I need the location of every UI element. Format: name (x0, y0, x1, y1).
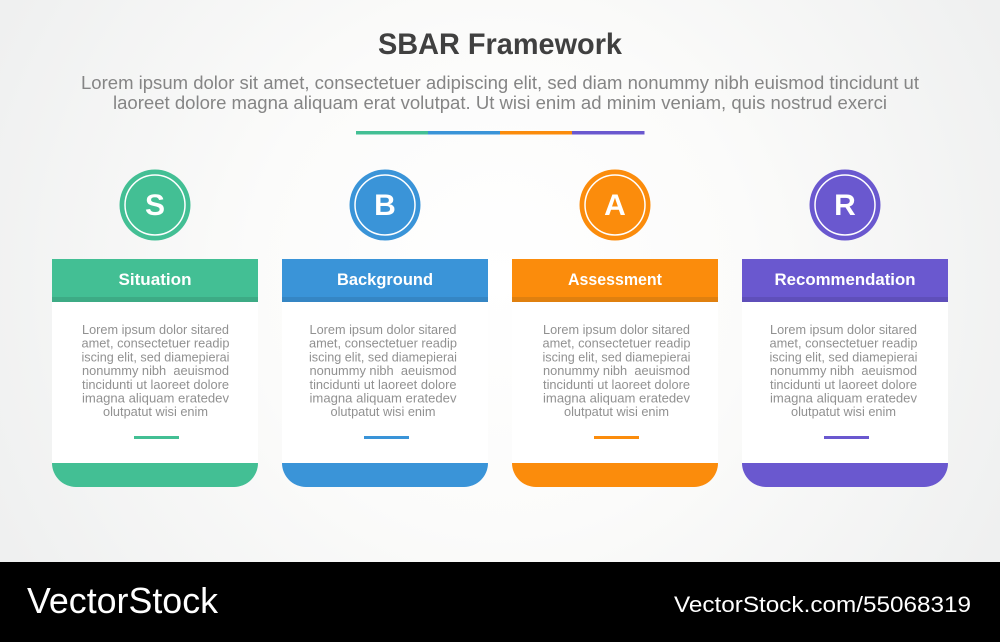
card footer (52, 463, 258, 487)
card body (282, 300, 488, 463)
accent dash (364, 436, 409, 439)
description text (542, 322, 691, 419)
description text: Lorem ipsum dolor sitared (82, 322, 229, 337)
description text: iscing elit, sed diamepierai (82, 349, 230, 364)
card footer (282, 463, 488, 487)
card footer (742, 463, 948, 487)
accent dash (134, 436, 179, 439)
description text: tincidunti ut laoreet dolore (770, 377, 917, 392)
accent dash (594, 436, 639, 439)
description text: iscing elit, sed diamepierai (770, 349, 918, 364)
description text: nonummy nibh aeuismod (310, 363, 456, 378)
subtitle text: laoreet dolore magna aliquam erat volutpat. Ut wisi enim ad minim veniam, quis nostrud exerci (113, 93, 887, 113)
card body (512, 300, 718, 463)
icon: A circle: A (604, 189, 626, 222)
title: SBAR Framework (378, 28, 622, 61)
description text: amet, consectetuer readip (309, 336, 457, 351)
card footer (512, 463, 718, 487)
header: Assessment (512, 259, 718, 302)
description text: iscing elit, sed diamepierai (542, 349, 690, 364)
description text (82, 322, 230, 419)
description text: imagna aliquam eratedev (310, 390, 457, 406)
header: Assessment: Assessment (568, 271, 662, 289)
description text: nonummy nibh aeuismod (770, 363, 917, 378)
description text: nonummy nibh aeuismod (543, 363, 690, 378)
description text: Lorem ipsum dolor sitared (543, 322, 690, 337)
header: Recommendation: Recommendation (774, 271, 916, 289)
header: Recommendation (742, 259, 948, 302)
panel: assessment (512, 170, 718, 487)
description text: imagna aliquam eratedev (543, 390, 691, 406)
description text: nonummy nibh aeuismod (82, 363, 229, 378)
description text (309, 322, 457, 419)
description text: amet, consectetuer readip (542, 336, 690, 351)
description text: olutpatut wisi enim (330, 404, 436, 419)
description text: tincidunti ut laoreet dolore (310, 377, 456, 392)
header: Situation (52, 259, 258, 302)
header: Background (282, 259, 488, 302)
description text: Lorem ipsum dolor sitared (770, 322, 917, 337)
header: Situation: Situation (118, 271, 192, 289)
description text (770, 322, 918, 419)
icon: A circle (580, 170, 650, 240)
description text: tincidunti ut laoreet dolore (82, 377, 229, 392)
watermark footer bar (0, 562, 1000, 642)
watermark url: VectorStock.com/55068319 (674, 592, 971, 617)
subtitle text: Lorem ipsum dolor sit amet, consectetuer adipiscing elit, sed diam nonummy nibh euismod tincidunt ut (81, 73, 919, 93)
card body (742, 300, 948, 463)
accent dash (824, 436, 869, 439)
description text: olutpatut wisi enim (564, 404, 669, 419)
card body (52, 300, 258, 463)
icon: B circle: B (374, 189, 396, 222)
description text: imagna aliquam eratedev (770, 390, 918, 406)
icon: R circle (810, 170, 880, 240)
icon: S circle: S (145, 189, 165, 222)
panel: recommendation (742, 170, 948, 487)
description text: imagna aliquam eratedev (82, 390, 230, 406)
description text: iscing elit, sed diamepierai (309, 349, 457, 364)
description text: olutpatut wisi enim (791, 404, 896, 419)
subtitle text (81, 73, 919, 113)
description text: Lorem ipsum dolor sitared (310, 322, 456, 337)
description text: amet, consectetuer readip (770, 336, 918, 351)
description text: amet, consectetuer readip (82, 336, 230, 351)
description text: olutpatut wisi enim (103, 404, 208, 419)
watermark logo text: VectorStock (27, 580, 219, 621)
icon: R circle: R (834, 189, 856, 222)
icon: S circle (120, 170, 190, 240)
icon: B circle (350, 170, 420, 240)
description text: tincidunti ut laoreet dolore (543, 377, 690, 392)
header: Background: Background (337, 271, 433, 289)
panel: situation (52, 170, 258, 487)
title underline: four colours (356, 131, 644, 134)
panel: background (282, 170, 488, 487)
